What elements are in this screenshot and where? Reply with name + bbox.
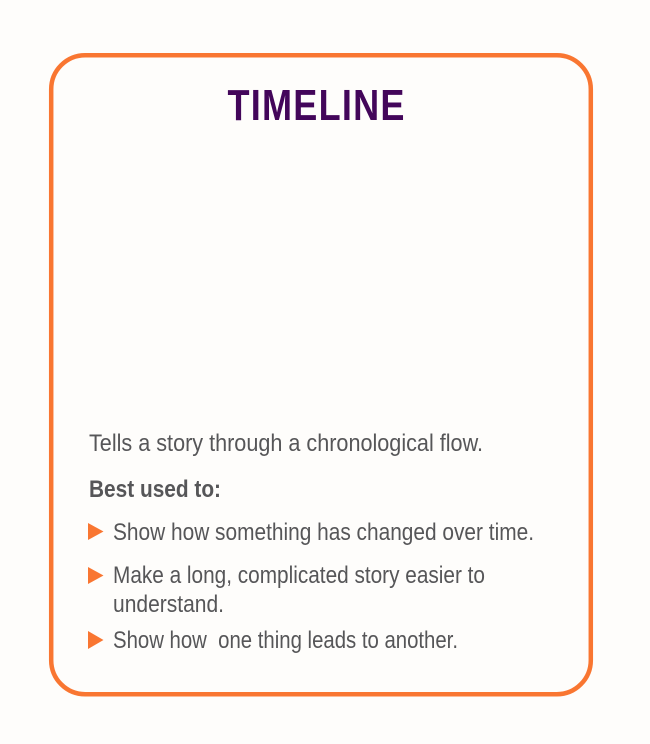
icon: bullet arrow 3 [88,631,104,649]
bullet text 2: understand. [113,591,224,618]
heading: best used to: Best used to: [89,476,221,503]
text block: description: Tells a story through a chronological flow. [89,430,483,457]
title: TIMELINE [228,81,406,130]
bullet text 2: Make a long, complicated story easier to [113,562,485,589]
bullet list [88,519,534,654]
panel: timeline card [51,55,591,694]
bullet text 1: Show how something has changed over time. [113,519,534,546]
icon: bullet arrow 1 [88,523,104,540]
bullet text 3: Show how one thing leads to another. [113,627,458,654]
bullet text 2 [113,562,485,618]
icon: bullet arrow 2 [88,567,104,584]
